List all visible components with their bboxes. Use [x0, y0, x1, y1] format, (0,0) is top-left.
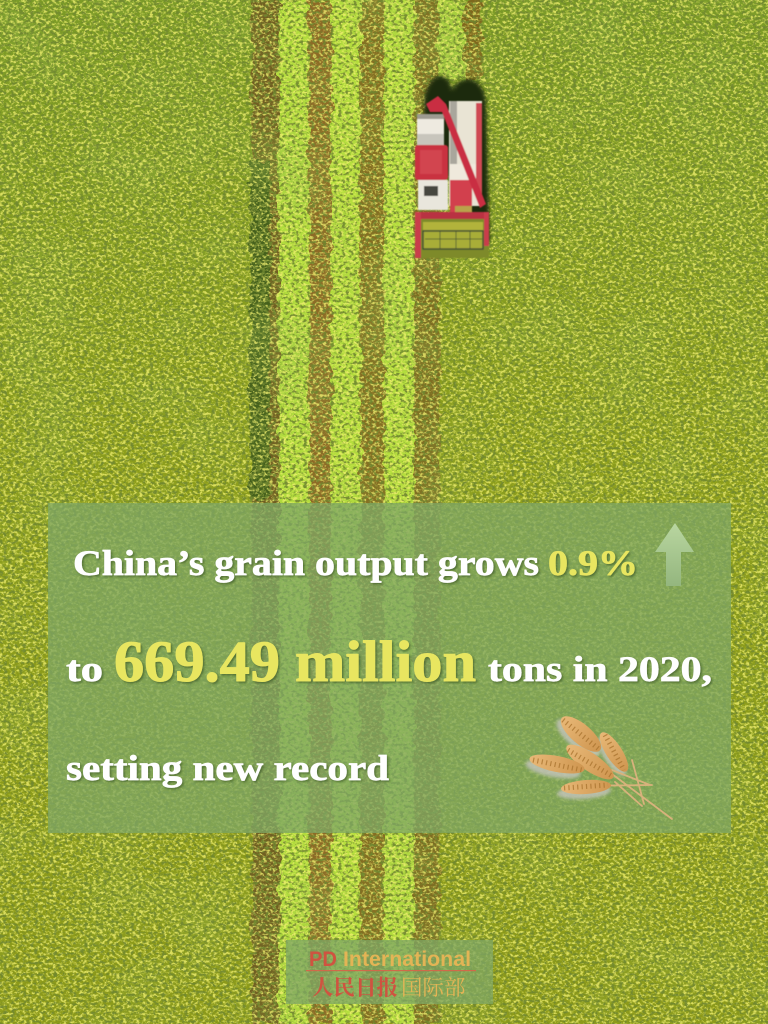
- figure: 0.9% growth: 0.9%: [548, 543, 638, 583]
- icon: up arrow: [655, 523, 694, 586]
- harvester body: [415, 96, 489, 258]
- headline line 3: setting new record: [66, 748, 389, 788]
- photo: red combine harvester: [415, 76, 490, 258]
- translucent text panel: [48, 503, 731, 833]
- unloading auger: [426, 96, 486, 208]
- harvested stripes down the field: [250, 0, 482, 1024]
- headline line 2: tons in 2020,: [488, 649, 712, 689]
- logo: PD International: 人民日报: [312, 976, 398, 1000]
- logo: PD International: [286, 940, 493, 1004]
- headline line 2: to: [66, 649, 103, 689]
- header reel: [415, 212, 489, 258]
- logo: PD International: International: [343, 948, 471, 971]
- headline line 2: [66, 629, 712, 694]
- logo: PD International: 国际部: [401, 976, 466, 1000]
- headline line 1: China’s grain output grows: [73, 543, 539, 583]
- figure: 669.49 million: 669.49 million: [114, 629, 476, 694]
- logo: PD International: PD: [309, 948, 337, 971]
- icon: wheat ears: [524, 710, 672, 819]
